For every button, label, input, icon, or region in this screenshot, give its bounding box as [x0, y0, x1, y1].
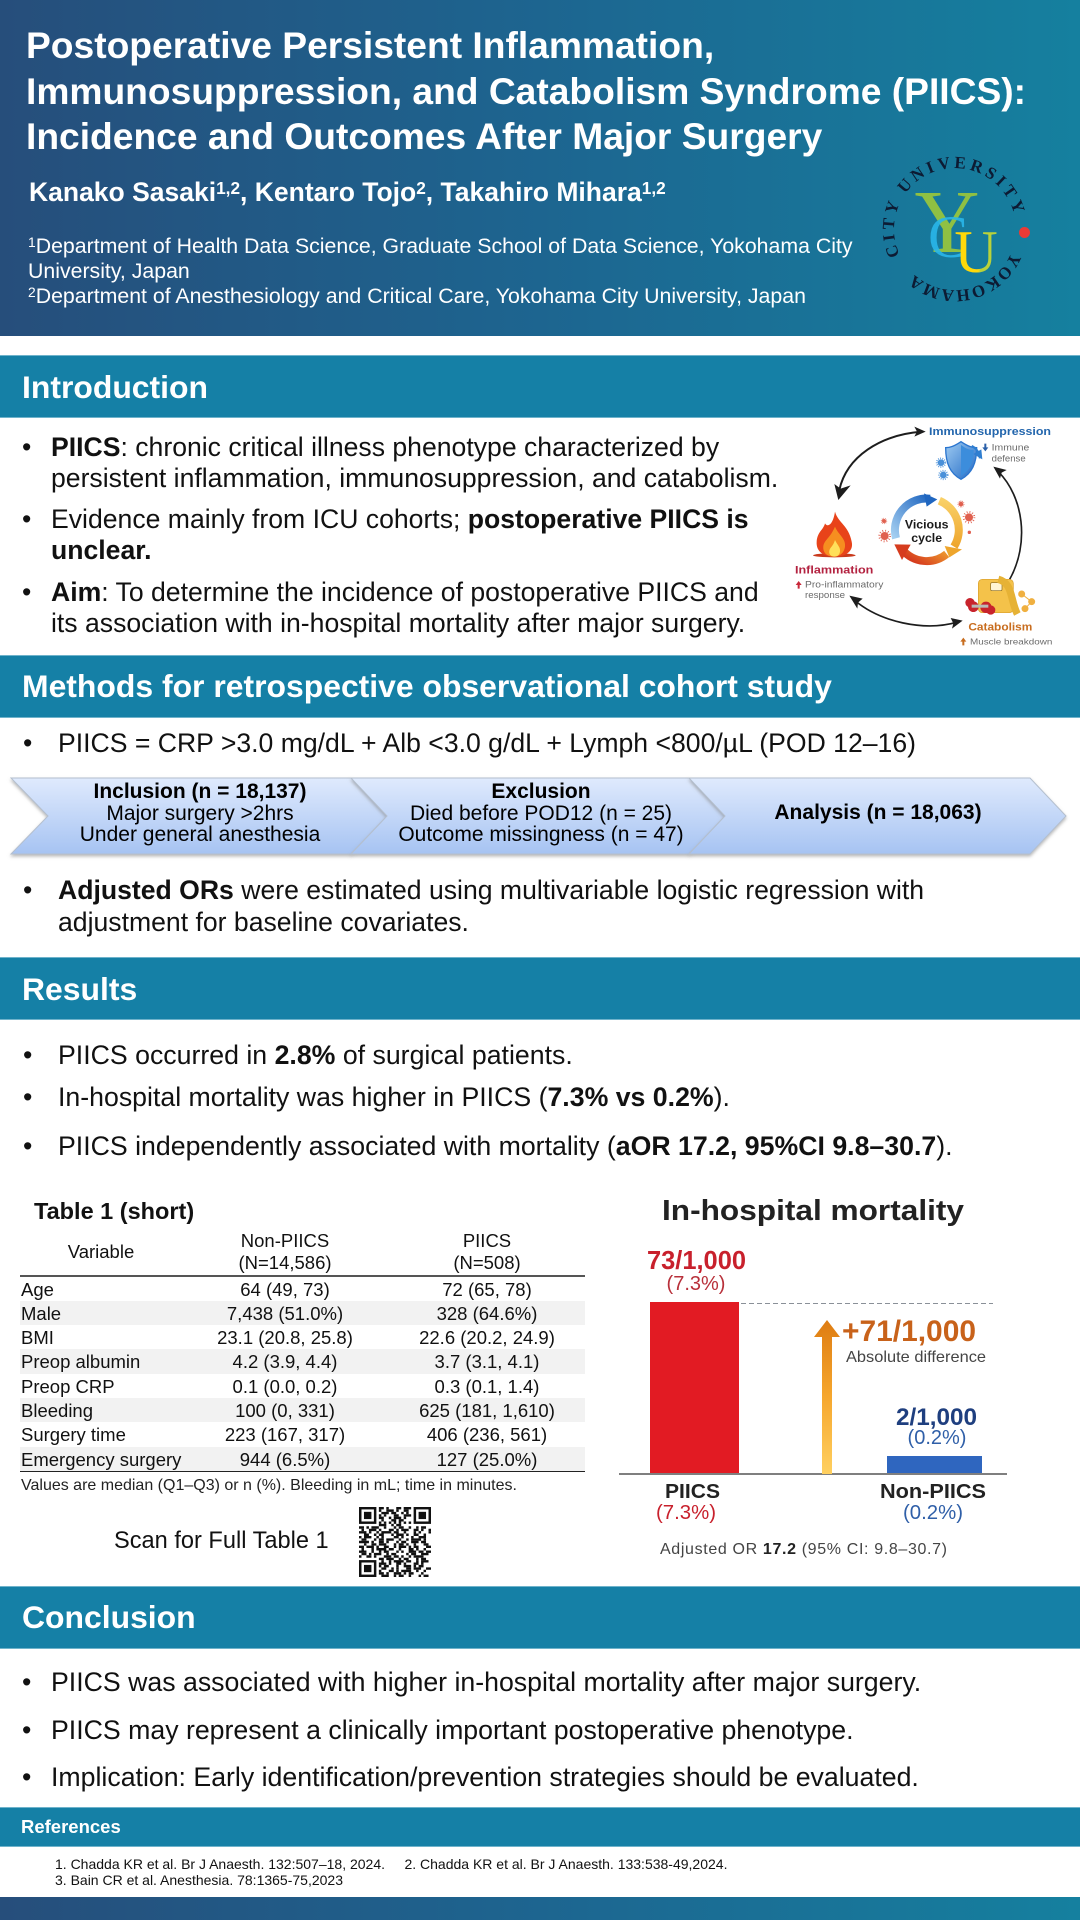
icon: Yokohama City University logo [882, 156, 1030, 302]
panel: conclusion bullets: PIICS may represent a clinically important postoperative phenotype. [51, 1714, 854, 1744]
panel: table 1: 406 (236, 561) [427, 1424, 547, 1445]
label: catabolism [960, 621, 1053, 646]
panel: table 1: 72 (65, 78) [442, 1278, 532, 1300]
label: immunosuppression: Immunosuppression [929, 426, 1051, 438]
text: adjusted OR: Adjusted OR 17.2 (95% CI: 9.8–30.7) [660, 1541, 947, 1558]
bullet: mortality [23, 1082, 730, 1112]
panel: table 1: Bleeding [21, 1400, 93, 1421]
panel: introduction text: Aim: To determine the incidence of postoperative PIICS and [51, 577, 759, 607]
bar: Non-PIICS [887, 1456, 982, 1474]
chevron: analysis: Analysis (n = 18,063) [774, 801, 982, 824]
panel: introduction text: Evidence mainly from ICU cohorts; postoperative PIICS is [51, 504, 749, 534]
panel: introduction text: persistent inflammation, immunosuppression, and catabolism. [51, 462, 778, 492]
section bar: Methods: Methods for retrospective observational cohort study [22, 668, 832, 704]
table title: Table 1 (short) [34, 1198, 194, 1224]
panel: introduction text: its association with in-hospital mortality after major surgery. [51, 608, 745, 638]
chevron: analysis [689, 778, 1066, 854]
bullet: adjusted OR: • [23, 1130, 32, 1160]
title: Incidence and Outcomes After Major Surgery [26, 115, 822, 157]
panel: introduction text: unclear. [51, 534, 152, 564]
table header: Non-PIICS [241, 1230, 329, 1250]
bullet: mortality: • [23, 1082, 32, 1112]
text: reference list [55, 1856, 727, 1888]
text: PIICS definition [23, 728, 916, 758]
panel: table 1: 0.3 (0.1, 1.4) [435, 1376, 539, 1397]
panel: table 1: 23.1 (20.8, 25.8) [217, 1327, 353, 1348]
label: PIICS value: (7.3%) [667, 1273, 725, 1295]
icon: Yokohama City University logo: Y [914, 173, 980, 272]
arrow: inflammation and catabolism [849, 596, 963, 629]
section bar: Conclusion [0, 1586, 1080, 1649]
axis label: Non-PIICS: Non-PIICS [880, 1481, 986, 1503]
panel: results bullets: In-hospital mortality was higher in PIICS (7.3% vs 0.2%). [58, 1082, 730, 1112]
affiliations: University, Japan [28, 259, 190, 283]
table header: (N=14,586) [238, 1252, 332, 1273]
panel: table 1: Emergency surgery [21, 1449, 181, 1470]
axis label: PIICS [656, 1481, 720, 1524]
table header: Variable [68, 1241, 134, 1262]
central cycle: cycle [911, 531, 942, 545]
panel: table 1: 328 (64.6%) [437, 1303, 537, 1324]
bullet: evidence [22, 504, 749, 564]
bullet: PIICS definition: • [22, 432, 31, 462]
bullet: implication [22, 1762, 919, 1792]
footer band [0, 1897, 1080, 1920]
label: absolute difference: +71/1,000 [842, 1315, 976, 1348]
label: immunosuppression: defense [992, 453, 1026, 463]
chevron: inclusion: Under general anesthesia [80, 823, 321, 846]
text: Adjusted ORs were estimated using multivariable logistic regression with [58, 875, 924, 905]
section bar: Introduction [0, 355, 1080, 418]
section bar: References: References [21, 1816, 121, 1837]
section bar: Results: Results [22, 970, 137, 1006]
central cycle [894, 493, 962, 561]
panel: table 1: 944 (6.5%) [240, 1449, 330, 1470]
bar: PIICS [650, 1302, 739, 1474]
icon: red viruses [879, 501, 974, 541]
chevron: inclusion: Major surgery >2hrs [106, 802, 294, 825]
x axis [619, 1473, 1007, 1475]
table header: PIICS [463, 1230, 511, 1250]
icon: flame [813, 512, 856, 557]
header banner [0, 0, 1080, 336]
title: Immunosuppression, and Catabolism Syndrome (PIICS): [26, 70, 1026, 112]
chevron: inclusion [11, 778, 387, 854]
label: immunosuppression [929, 426, 1051, 463]
bullet: adjusted OR [23, 1130, 953, 1160]
arrow: absolute difference [814, 1320, 840, 1474]
label: catabolism: Muscle breakdown [970, 636, 1053, 646]
panel: introduction text: PIICS: chronic critical illness phenotype characterized by [51, 432, 719, 462]
title [26, 24, 1026, 157]
panel: table 1: 22.6 (20.2, 24.9) [419, 1327, 555, 1348]
icon: Yokohama City University logo: YOKOHAMA [912, 255, 1022, 302]
bullet: mortality finding [22, 1666, 921, 1696]
section bar: Methods [0, 655, 1080, 718]
section bar: References [0, 1807, 1080, 1847]
bullet: incidence [23, 1040, 573, 1070]
text: adjusted ORs: • [23, 875, 32, 905]
bullet: implication: • [22, 1762, 31, 1792]
label: Non-PIICS value [896, 1404, 977, 1449]
table footnote: Values are median (Q1–Q3) or n (%). Bleeding in mL; time in minutes. [21, 1477, 517, 1494]
panel: table 1: 3.7 (3.1, 4.1) [435, 1351, 539, 1372]
bullet: mortality finding: • [22, 1666, 31, 1696]
text: PIICS = CRP >3.0 mg/dL + Alb <3.0 g/dL + Lymph <800/µL (POD 12–16) [58, 728, 916, 758]
flow diagram: study chevrons [10, 778, 1068, 858]
icon: Yokohama City University logo: U [954, 219, 998, 285]
panel: table 1: 223 (167, 317) [225, 1424, 345, 1445]
panel: results bullets: PIICS occurred in 2.8% of surgical patients. [58, 1040, 573, 1070]
axis label: Non-PIICS [880, 1481, 986, 1524]
chevron: inclusion: Inclusion (n = 18,137) [94, 780, 306, 803]
panel: table 1: BMI [21, 1327, 54, 1348]
panel: conclusion bullets: PIICS was associated with higher in-hospital mortality after major surgery. [51, 1666, 921, 1696]
chevron: exclusion: Died before POD12 (n = 25) [410, 802, 672, 825]
axis label: PIICS: (7.3%) [656, 1502, 716, 1524]
label: Non-PIICS value: 2/1,000 [896, 1404, 977, 1431]
text: adjustment for baseline covariates. [58, 907, 469, 937]
arrow: immunosuppression to inflammation [834, 427, 926, 500]
panel: conclusion bullets [22, 1666, 921, 1792]
panel: table 1: Male [21, 1303, 61, 1324]
QR code [359, 1507, 431, 1577]
label: immunosuppression: Immune [992, 443, 1029, 453]
panel: introduction text [22, 432, 778, 638]
panel: table 1: Age [21, 1278, 54, 1300]
chevron: exclusion: Exclusion [491, 780, 591, 803]
axis label: PIICS: PIICS [665, 1481, 720, 1503]
label: Non-PIICS value: (0.2%) [908, 1427, 966, 1449]
authors: Kanako Sasaki1,2, Kentaro Tojo2, Takahiro Mihara1,2 [29, 177, 666, 207]
panel: table 1: 100 (0, 331) [235, 1400, 335, 1421]
section bar: Conclusion: Conclusion [22, 1598, 196, 1634]
panel: results bullets: PIICS independently associated with mortality (aOR 17.2, 95%CI 9.8–30.7). [58, 1130, 953, 1160]
affiliations: 2Department of Anesthesiology and Critical Care, Yokohama City University, Japan [28, 284, 806, 308]
text: reference list: 1. Chadda KR et al. Br J Anaesth. 132:507–18, 2024. 2. Chadda KR et al. Br J Anaesth. 133:538-49,2024. [55, 1856, 727, 1872]
icon: Yokohama City University logo: CITY UNIVERSITY [882, 156, 1025, 257]
label: PIICS value [647, 1245, 746, 1295]
table header [68, 1230, 521, 1273]
text: reference list: 3. Bain CR et al. Anesthesia. 78:1365-75,2023 [55, 1872, 343, 1888]
axis label: Non-PIICS: (0.2%) [903, 1502, 963, 1524]
chart title: In-hospital mortality [662, 1195, 964, 1227]
icon: Yokohama City University logo: C [928, 204, 968, 270]
central cycle: Vicious [905, 518, 949, 532]
bullet: aim: • [22, 577, 31, 607]
icon: shield with viruses [937, 442, 982, 479]
bullet: aim [22, 577, 759, 638]
label: inflammation: response [805, 590, 845, 600]
bullet: incidence: • [23, 1040, 32, 1070]
label: PIICS value: 73/1,000 [647, 1245, 746, 1275]
affiliations: 1Department of Health Data Science, Graduate School of Data Science, Yokohama City [28, 234, 853, 258]
label: catabolism: Catabolism [968, 621, 1033, 633]
title: Postoperative Persistent Inflammation, [26, 24, 714, 66]
bullet: evidence: • [22, 504, 31, 534]
bullet: phenotype [22, 1714, 854, 1744]
table header: (N=508) [453, 1252, 521, 1273]
panel: table 1: 64 (49, 73) [240, 1278, 330, 1300]
text: scan for full table: Scan for Full Table 1 [114, 1528, 329, 1554]
panel: table 1: 625 (181, 1,610) [419, 1400, 555, 1421]
reference dashed line [741, 1302, 993, 1304]
arrow: catabolism to immunosuppression [993, 467, 1022, 580]
chevron: exclusion: Outcome missingness (n = 47) [398, 823, 684, 846]
section bar: Introduction: Introduction [22, 368, 208, 404]
label: absolute difference: Absolute difference [846, 1349, 986, 1366]
text: PIICS definition: • [23, 728, 32, 758]
panel: table 1: Preop CRP [21, 1376, 115, 1397]
panel: results bullets [23, 1040, 953, 1160]
bullet: PIICS definition [22, 432, 778, 492]
section bar: Results [0, 957, 1080, 1020]
text: adjusted ORs [23, 875, 924, 937]
label: inflammation: Pro-inflammatory [805, 579, 884, 589]
icon: scale, tape, dumbbell and molecule [965, 579, 1035, 615]
label: inflammation: Inflammation [795, 564, 874, 576]
panel: table 1 [20, 1198, 585, 1494]
label: absolute difference [842, 1315, 986, 1366]
panel: table 1: 4.2 (3.9, 4.4) [233, 1351, 337, 1372]
panel: conclusion bullets: Implication: Early identification/prevention strategies should be evaluated. [51, 1762, 919, 1792]
bullet: phenotype: • [22, 1714, 31, 1744]
diagram: vicious cycle of PIICS [795, 426, 1053, 646]
chart: in-hospital mortality [619, 1195, 1007, 1558]
panel: table 1: Preop albumin [21, 1351, 140, 1372]
panel: table 1: Surgery time [21, 1424, 126, 1445]
panel: table 1: 127 (25.0%) [437, 1449, 537, 1470]
panel: table 1: 7,438 (51.0%) [227, 1303, 343, 1324]
panel: table 1: 0.1 (0.0, 0.2) [233, 1376, 337, 1397]
label: inflammation [795, 564, 884, 600]
chevron: exclusion [351, 778, 725, 854]
affiliations [28, 234, 853, 308]
